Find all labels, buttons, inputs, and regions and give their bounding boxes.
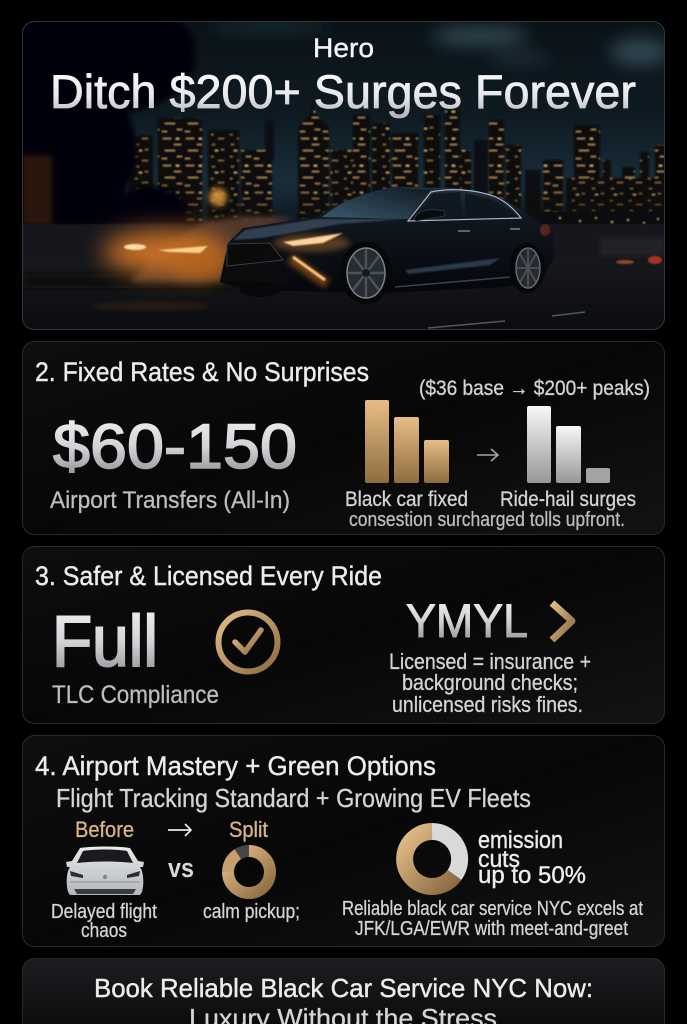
chart: emissions donut bbox=[405, 831, 460, 886]
icon: rear wheel bbox=[509, 243, 545, 293]
panel: airport and green bbox=[22, 736, 664, 946]
text: licensed explanation: background checks; bbox=[402, 670, 578, 695]
icon: front wheel bbox=[340, 242, 392, 304]
heading: book now: Book Reliable Black Car Service NYC Now: bbox=[94, 973, 593, 1003]
label: black car fixed: Black car fixed bbox=[345, 488, 468, 511]
bar chart: ride-hail surges bbox=[527, 406, 610, 483]
panel: safer and licensed bbox=[22, 546, 664, 724]
label: before: Before bbox=[75, 817, 134, 842]
label: ride-hail surges: Ride-hail surges bbox=[500, 488, 636, 511]
trees bbox=[23, 22, 196, 225]
icon: chevron bbox=[552, 603, 572, 640]
text: base to peaks: ($36 base → $200+ peaks) bbox=[419, 377, 650, 400]
label: calm pickup: calm pickup; bbox=[203, 901, 300, 923]
text: airport transfers: Airport Transfers (All-In) bbox=[50, 487, 290, 514]
icon: blurred car bbox=[95, 216, 296, 282]
text: licensed explanation: unlicensed risks fines. bbox=[392, 692, 583, 717]
text: emission cuts bbox=[478, 827, 586, 889]
panel: hero bbox=[5, 5, 670, 330]
heading: section 4: 4. Airport Mastery + Green Options bbox=[35, 751, 436, 781]
text: vs: vs bbox=[168, 853, 194, 883]
heading: section 3: 3. Safer & Licensed Every Ride bbox=[35, 561, 382, 591]
heading: hero title: Ditch $200+ Surges Forever bbox=[50, 65, 636, 118]
big word: full: Full bbox=[52, 602, 158, 682]
text: TLC compliance: TLC Compliance bbox=[52, 681, 219, 709]
label: delayed flight chaos bbox=[51, 901, 157, 942]
text: emission cuts: emission bbox=[478, 827, 563, 854]
bar chart: black car fixed bbox=[365, 400, 449, 483]
shore lights bbox=[540, 212, 664, 224]
label: delayed flight chaos: chaos bbox=[81, 920, 127, 942]
subheading: flight tracking: Flight Tracking Standard + Growing EV Fleets bbox=[56, 783, 531, 813]
text: emission cuts: cuts bbox=[478, 846, 520, 873]
text: licensed explanation: Licensed = insurance + bbox=[389, 649, 591, 674]
arrow: chart transition bbox=[477, 449, 498, 461]
text: reliable service note: JFK/LGA/EWR with meet-and-greet bbox=[355, 918, 628, 940]
label: delayed flight chaos: Delayed flight bbox=[51, 901, 157, 923]
text: hero label: Hero bbox=[313, 33, 374, 63]
panel: call to action bbox=[22, 958, 664, 1024]
clouds bbox=[210, 21, 670, 66]
text: surcharge note: consestion surcharged tolls upfront. bbox=[349, 509, 625, 531]
chart: small donut bbox=[228, 851, 270, 893]
skyline bbox=[129, 100, 665, 230]
big number: price range: $60-150 bbox=[53, 412, 297, 482]
road bbox=[23, 223, 664, 262]
icon: check badge bbox=[218, 612, 278, 672]
arrow: before to split bbox=[168, 824, 191, 836]
text: licensed explanation bbox=[389, 649, 591, 717]
icon: front view car bbox=[66, 846, 144, 895]
text: emission cuts: up to 50% bbox=[478, 862, 586, 889]
label: split: Split bbox=[229, 817, 268, 842]
text: reliable service note bbox=[342, 898, 643, 940]
heading: section 2: 2. Fixed Rates & No Surprises bbox=[35, 357, 369, 387]
big word: YMYL: YMYL bbox=[406, 594, 528, 647]
icon: black sedan bbox=[220, 187, 555, 304]
panel: fixed rates bbox=[22, 342, 664, 534]
